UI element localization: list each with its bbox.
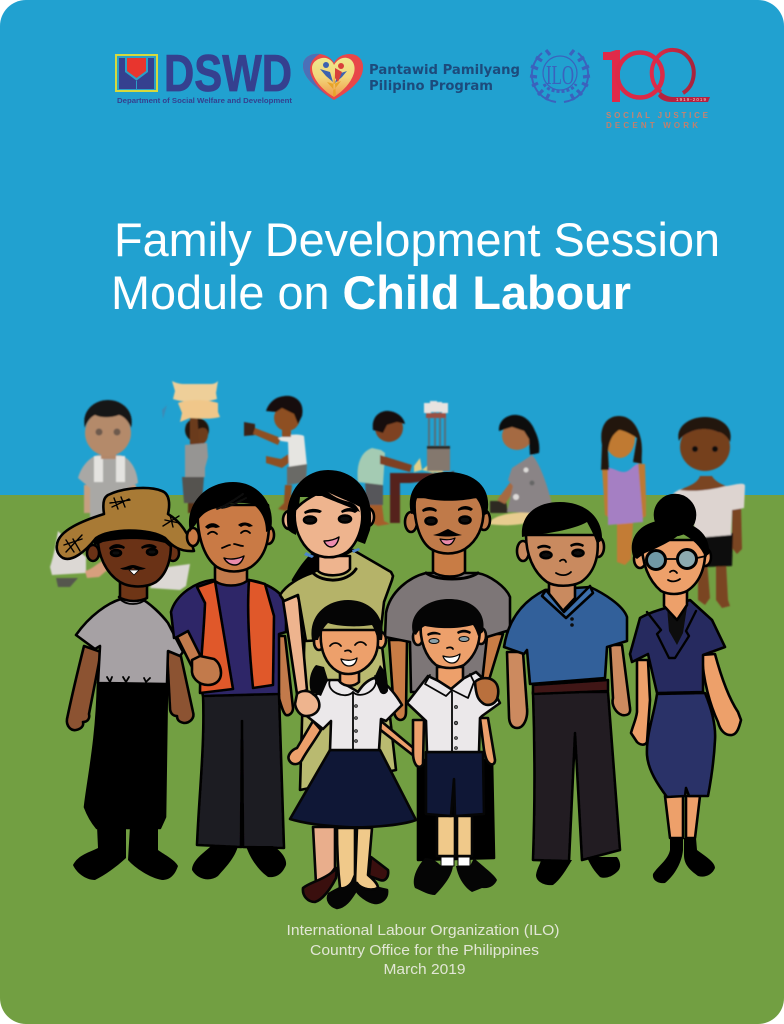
- background child: girl in grey dress: [488, 415, 553, 525]
- footer: publisher and date: International Labour Organization (ILO): [286, 922, 560, 939]
- logo: Pantawid Pamilyang Pilipino Program: Pilipino Program: [369, 78, 493, 94]
- logo: ILO centenary 100: SOCIAL JUSTICE: [606, 111, 709, 120]
- logo: Pantawid Pamilyang Pilipino Program: Pantawid Pamilyang: [369, 62, 520, 78]
- logo: ILO wreath: ILO: [546, 60, 574, 90]
- background child: girl in purple dress: [601, 416, 646, 565]
- title: [111, 213, 720, 319]
- logo: DSWD: [116, 45, 293, 105]
- title: Module on Child Labour: [111, 266, 631, 319]
- person: father in grey shirt: [385, 472, 510, 860]
- logo: ILO centenary 100: 1919-2019: [676, 97, 706, 102]
- logo: DSWD: Department of Social Welfare and Development: [117, 98, 293, 105]
- logo: ILO centenary 100: [603, 50, 710, 130]
- background child: boy holding pail: [244, 396, 307, 511]
- footer: publisher and date: March 2019: [384, 961, 466, 978]
- person: woman with glasses and bun: [630, 495, 741, 883]
- background child: boy with straps and sacks: [50, 400, 190, 590]
- background child: boy making arrows at table: [358, 401, 454, 526]
- background child: boy carrying sacks: [162, 381, 220, 513]
- person: woman in green shirt: [280, 470, 396, 790]
- person: schoolboy: [407, 599, 500, 895]
- person: father's hand on boy's shoulder: [475, 678, 498, 705]
- logo: DSWD: DSWD: [164, 45, 292, 103]
- logo: Pantawid Pamilyang Pilipino Program: [303, 54, 520, 100]
- footer: publisher and date: [286, 922, 560, 978]
- person: man in straw hat: [57, 488, 194, 880]
- logo: ILO centenary 100: DECENT WORK: [606, 121, 698, 130]
- footer: publisher and date: Country Office for the Philippines: [310, 942, 539, 959]
- background child: boy in white shirt: [673, 417, 745, 608]
- logo: ILO wreath: [530, 50, 590, 102]
- title: Family Development Session: [114, 213, 720, 266]
- person: man in blue polo: [504, 502, 630, 885]
- person: schoolgirl: [288, 600, 417, 908]
- person: woman's hand on girl's shoulder: [295, 691, 319, 716]
- person: man in orange vest: [171, 482, 293, 879]
